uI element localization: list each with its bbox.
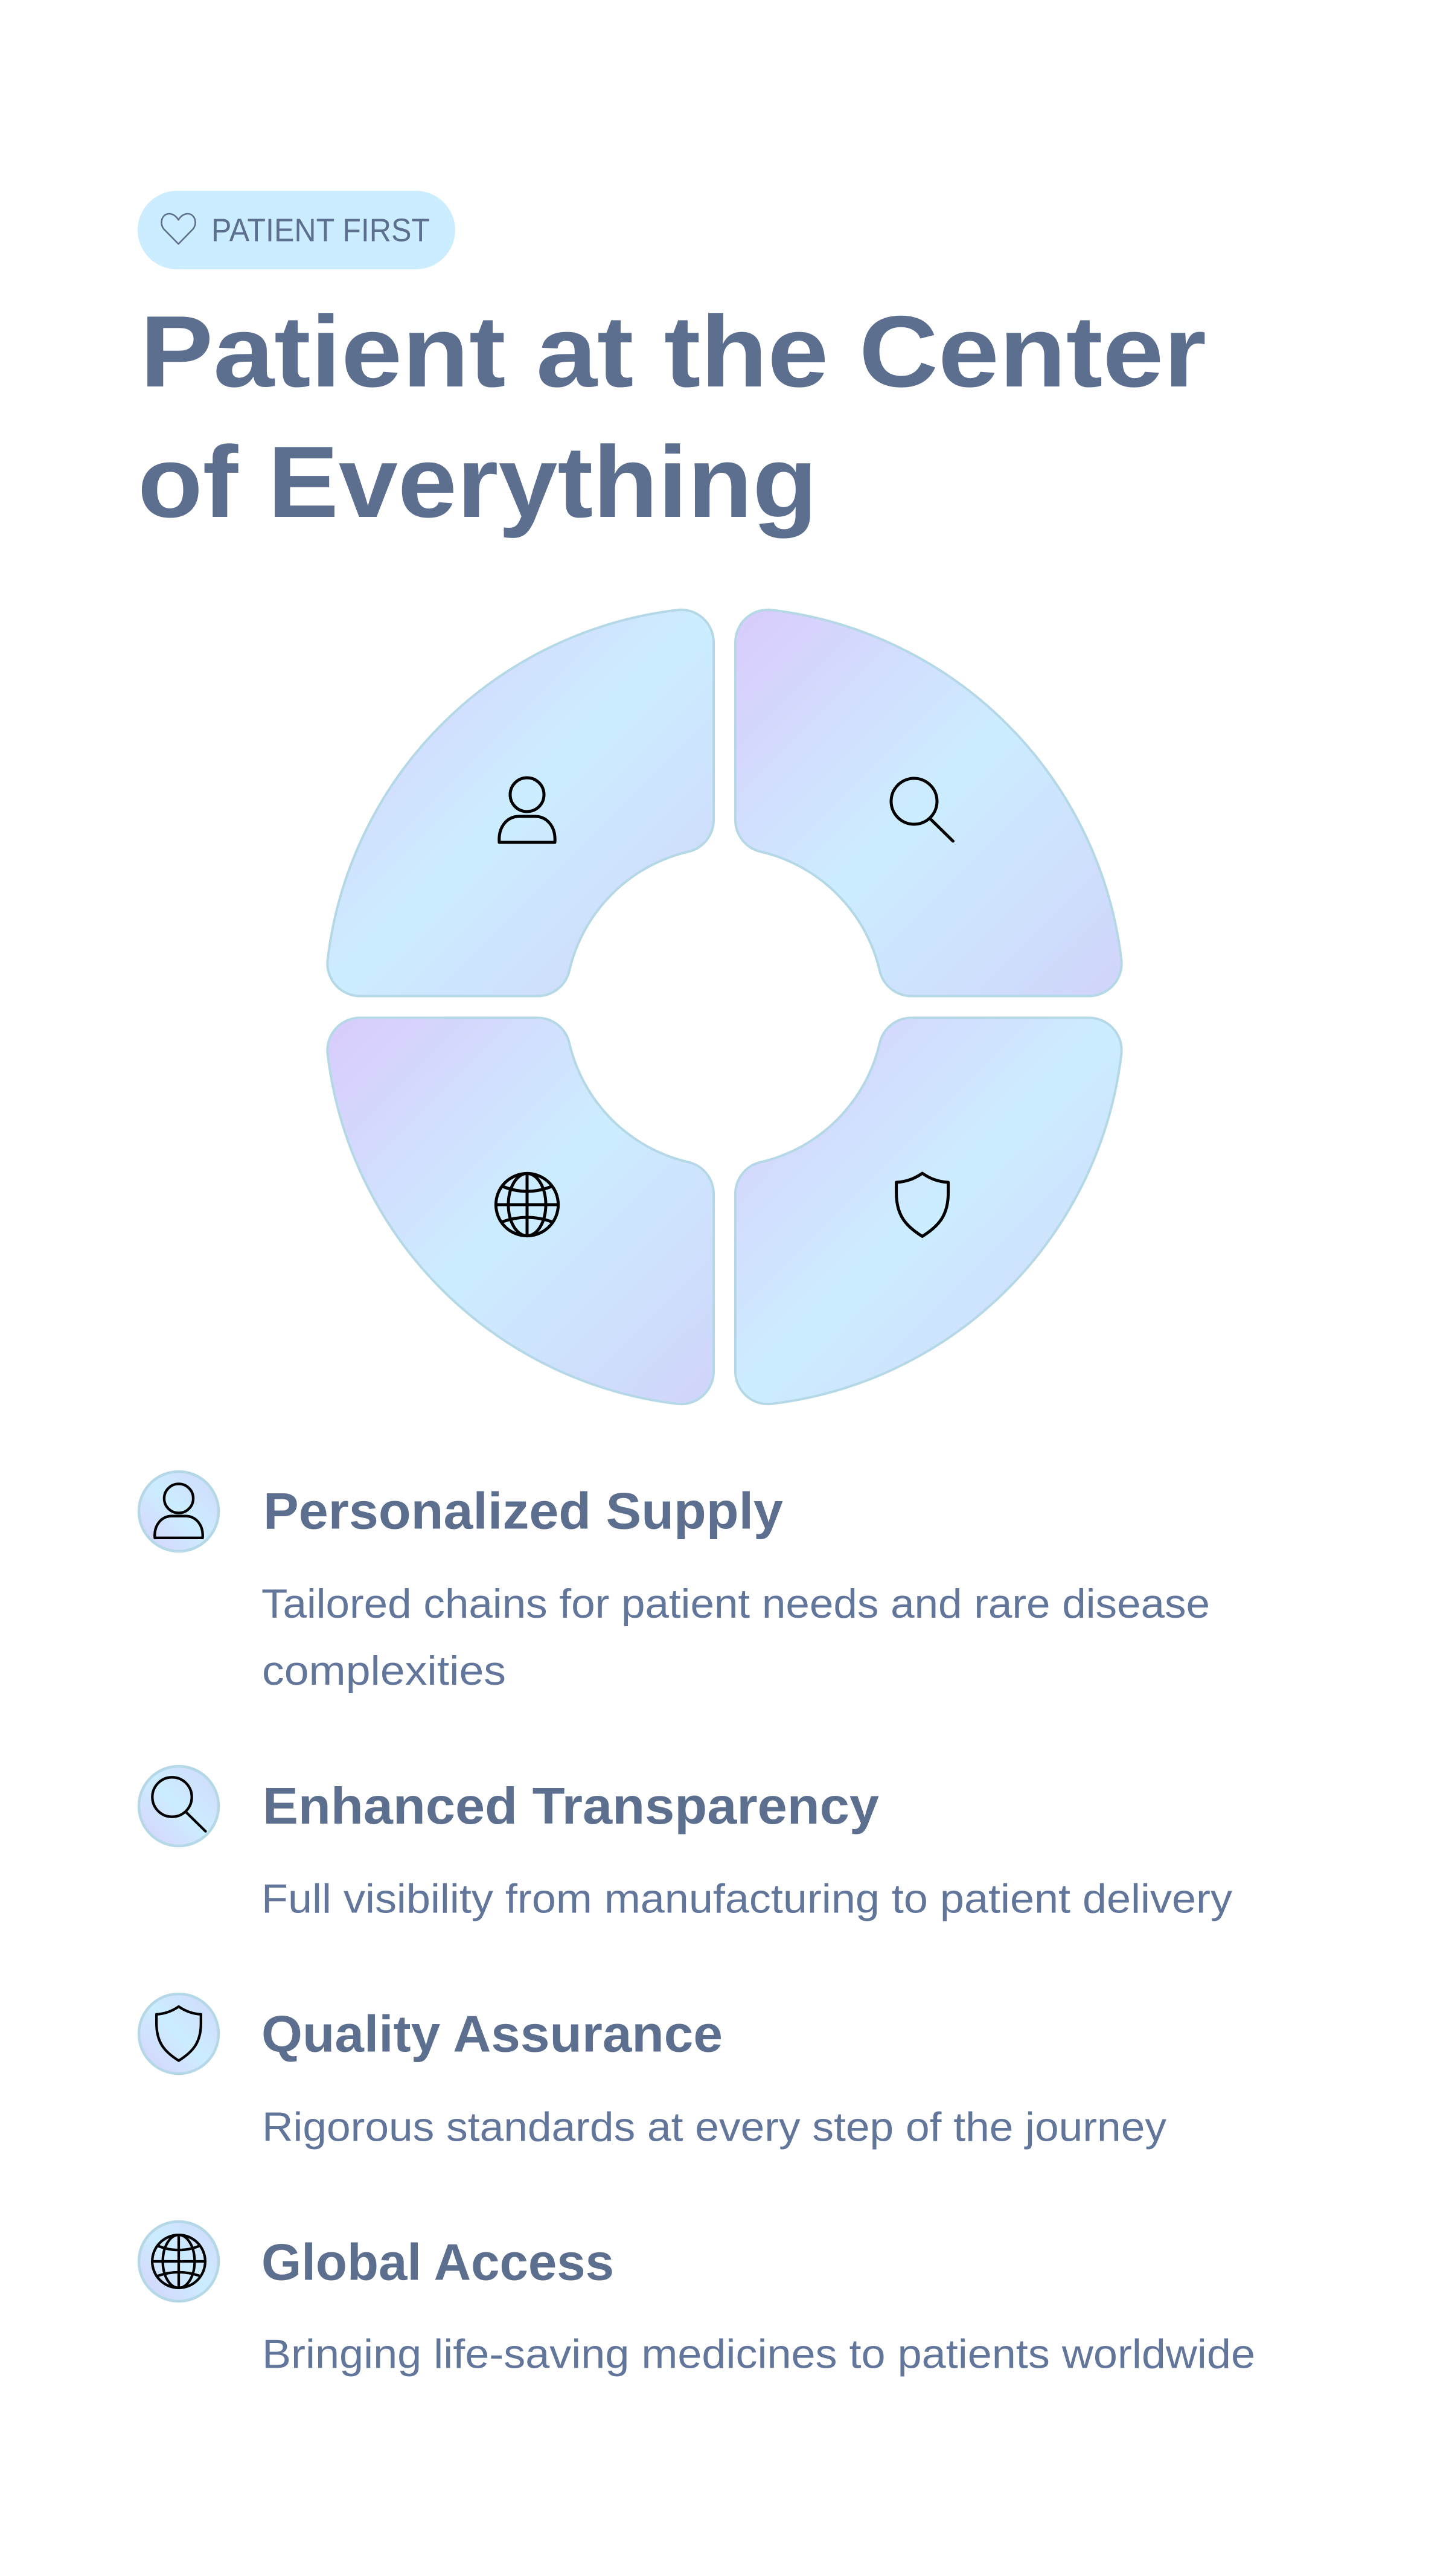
title: of Everything xyxy=(138,425,817,539)
icon: globe xyxy=(496,1173,558,1236)
item description: Tailored chains for patient needs and rare disease xyxy=(261,1581,1210,1627)
item heading: Quality Assurance xyxy=(261,2006,723,2063)
badge background xyxy=(138,191,455,269)
item description xyxy=(261,1581,1210,1694)
segment: personalized supply (top left) xyxy=(327,610,714,996)
segment: quality assurance (bottom right) xyxy=(735,1018,1122,1404)
icon badge: globe xyxy=(139,2222,219,2301)
icon: person xyxy=(499,778,555,842)
title xyxy=(138,295,1206,539)
icon: magnifier xyxy=(891,778,953,841)
list item: personalized supply xyxy=(139,1472,1210,1694)
item description: complexities xyxy=(262,1648,506,1694)
item description: Full visibility from manufacturing to patient delivery xyxy=(261,1876,1232,1921)
donut diagram xyxy=(327,610,1122,1404)
list item: quality assurance xyxy=(139,1994,1166,2150)
title: Patient at the Center xyxy=(140,295,1206,408)
icon: heart xyxy=(162,214,196,244)
item description: Rigorous standards at every step of the journey xyxy=(262,2104,1166,2150)
icon badge: magnifier xyxy=(139,1766,219,1846)
icon badge: shield xyxy=(139,1994,219,2074)
item heading: Personalized Supply xyxy=(263,1483,783,1540)
segment: enhanced transparency (top right) xyxy=(735,610,1122,996)
item heading: Global Access xyxy=(261,2234,614,2291)
badge label: PATIENT FIRST xyxy=(211,213,430,249)
item heading: Enhanced Transparency xyxy=(263,1778,879,1835)
segment: global access (bottom left) xyxy=(327,1018,714,1404)
item description: Bringing life-saving medicines to patients worldwide xyxy=(262,2331,1255,2377)
icon: shield xyxy=(897,1173,948,1237)
list item: enhanced transparency xyxy=(139,1766,1232,1921)
badge: patient first xyxy=(138,191,455,269)
icon badge: person xyxy=(139,1472,219,1551)
list item: global access xyxy=(139,2222,1255,2377)
